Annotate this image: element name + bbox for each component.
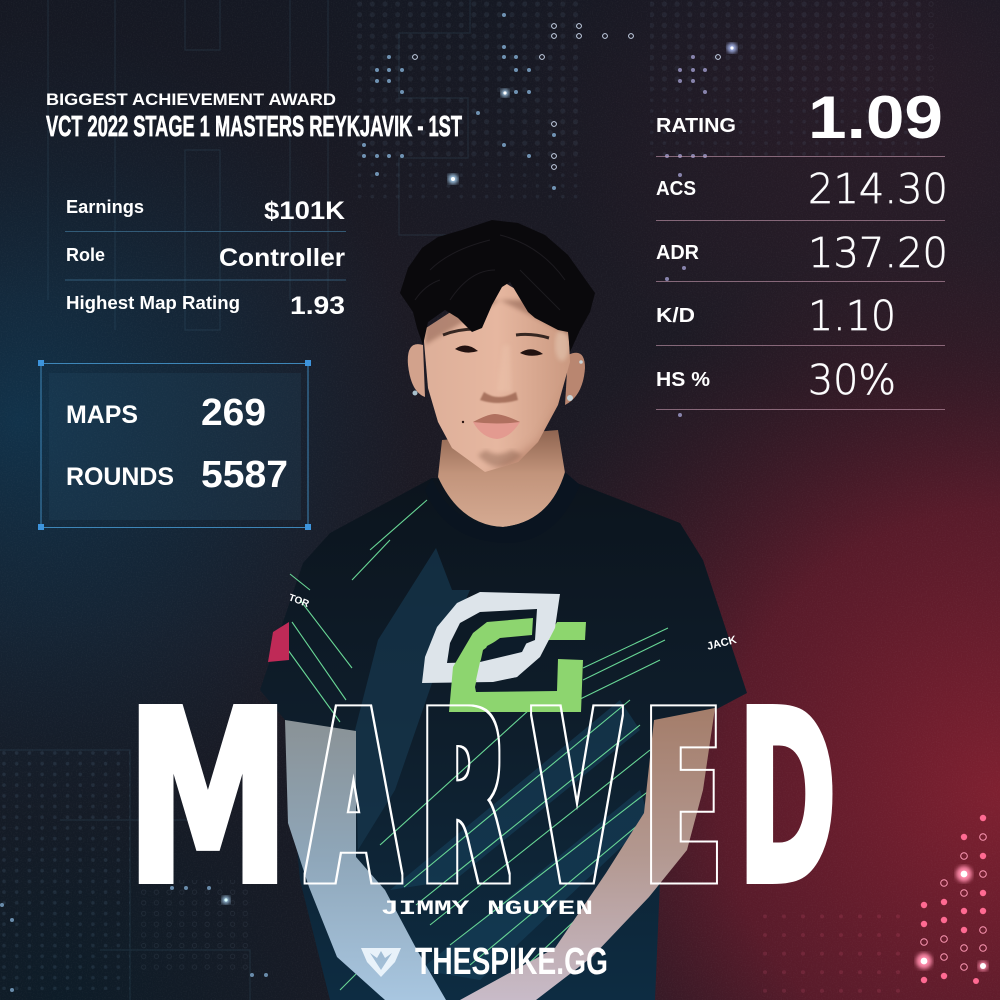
panel: player info [65,197,346,320]
sleeve text right: JACK [706,634,738,653]
row: role: Role [66,245,105,265]
real name: JIMMY NGUYEN [381,898,593,921]
stat: acs [656,165,948,213]
letters A R V E outlined: A [308,664,398,934]
row: earnings: $101K [264,197,345,225]
award title: VCT 2022 STAGE 1 MASTERS REYKJAVIK - 1ST [46,111,462,143]
neck [438,430,565,527]
icon: spike shield [361,948,401,977]
rounds [66,454,288,496]
letter D: D [738,661,837,936]
wordmark: THESPIKE.GG [415,941,608,983]
stat: k/d: 1.10 [808,292,896,340]
heading: biggest achievement [46,91,462,143]
OG logo [422,592,586,712]
stat: rating: RATING [656,115,736,137]
mole [462,421,464,423]
rounds: ROUNDS [66,463,174,491]
stat: hs [656,356,896,404]
row: highest map rating: 1.93 [290,292,345,320]
dot field: bottom left [0,750,268,992]
award label: BIGGEST ACHIEVEMENT AWARD [46,91,336,109]
stat: hs: HS % [656,369,710,391]
row: highest map rating: Highest Map Rating [66,293,240,313]
sleeve text left: TOR [287,592,311,610]
face [424,284,570,472]
stat: rating [656,84,943,151]
maps: 269 [201,392,266,434]
brand logo [361,941,608,983]
circuit lines [0,0,470,1000]
maps: MAPS [66,401,138,429]
row: role: Controller [219,244,345,272]
stat: adr: 137.20 [808,229,948,277]
row: earnings: Earnings [66,197,144,217]
dot field: bottom right [760,815,988,1000]
stat: acs: ACS [656,178,696,200]
rounds: 5587 [201,454,288,496]
right arm [460,708,715,1000]
maps [66,392,266,434]
stat: adr [656,229,948,277]
stat: k/d [656,292,896,340]
player photo illustration [260,220,747,1000]
collar [425,472,580,543]
dot field: top [350,0,940,417]
letters A R V E outlined [308,664,720,934]
stat: rating: 1.09 [808,84,943,151]
letters A R V E outlined: V [535,664,619,934]
panel: maps and rounds [38,360,311,530]
stat: acs: 214.30 [808,165,948,213]
jersey [260,478,747,1000]
left arm [285,720,446,1000]
stat: hs: 30% [808,356,896,404]
row: role [66,244,345,272]
letters A R V E outlined: R [422,664,508,934]
eyebrows [443,329,549,338]
letter M: M [126,661,290,936]
sleeve badge [268,622,289,662]
name: MARVED: E [646,664,720,934]
sparkles [222,43,737,904]
row: earnings [66,197,345,225]
eyes [455,345,543,356]
ears [408,344,585,405]
row: highest map rating [66,292,345,320]
stat: k/d: K/D [656,305,695,327]
stat: adr: ADR [656,242,700,264]
mouth [473,414,520,439]
panel: performance stats [656,84,948,410]
hair [400,220,595,352]
name: MARVED [126,661,837,936]
